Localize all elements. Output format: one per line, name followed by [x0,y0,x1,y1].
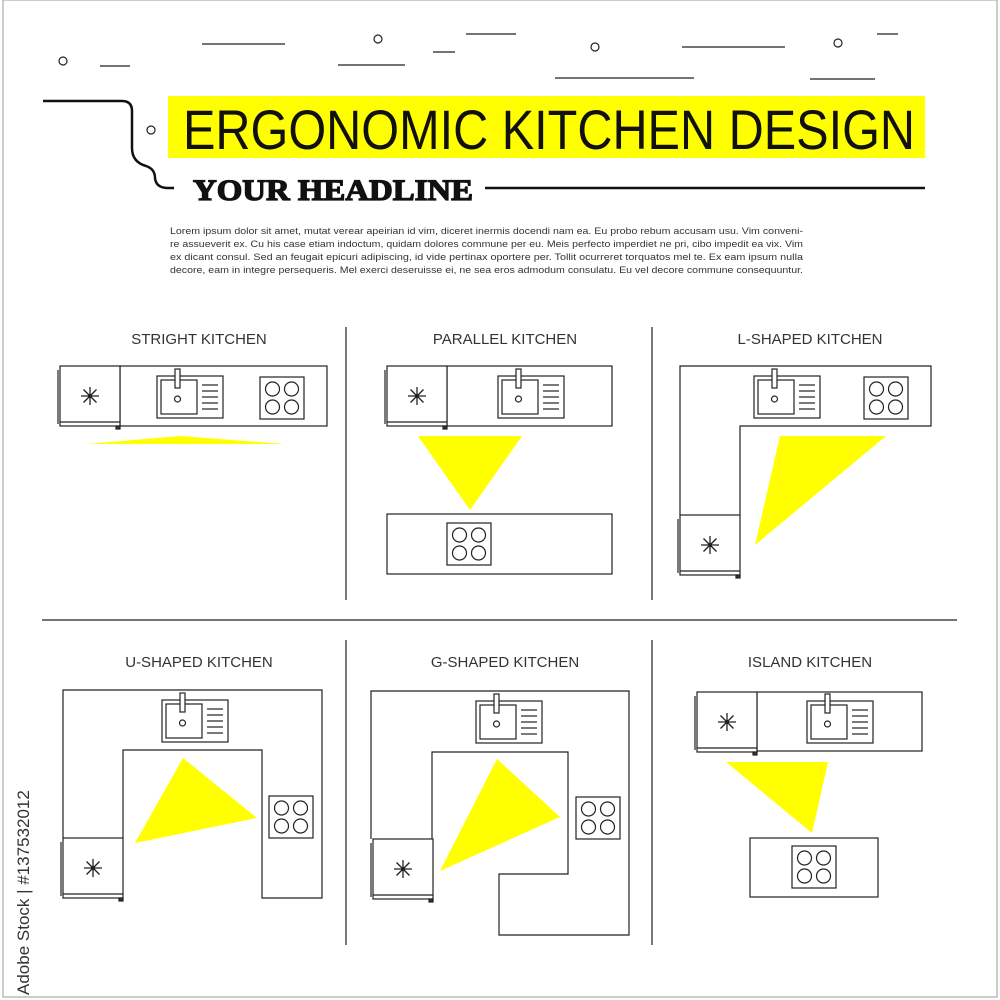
panel: straight kitchen: STRIGHT KITCHEN [131,331,267,348]
intro paragraph: re assueverit ex. Cu his case etiam indoctum, quidam dolores commune per eu. Meis perfecto imperdiet ne pri, cibo impedit ea vix. Vim [170,239,803,250]
panel: L-shaped kitchen [678,331,931,578]
panel: parallel kitchen: PARALLEL KITCHEN [433,331,577,348]
intro paragraph: ex dicant consul. Sed an feugait epicuri adipiscing, id vide pertinax oportere per. Tollit ocurreret torquatos mel te. Ex eam ipsum nulla [170,252,804,263]
panel: island kitchen [695,654,922,897]
panel: L-shaped kitchen: L-SHAPED KITCHEN [737,331,883,348]
decorative connector line [43,101,174,188]
panel: G-shaped kitchen [371,654,629,935]
intro paragraph [170,226,804,276]
subtitle: your headline: YOUR HEADLINE [193,174,473,207]
panel: straight kitchen [58,331,327,444]
panel: U-shaped kitchen [61,654,322,901]
panel: U-shaped kitchen: U-SHAPED KITCHEN [125,654,273,671]
panel: parallel kitchen [385,331,612,574]
intro paragraph: Lorem ipsum dolor sit amet, mutat verear apeirian id vim, diceret inermis docendi nam ea. Eu probo rebum accusam usu. Vim conveni- [170,226,803,237]
watermark credit: Adobe Stock | #137532012 [14,790,33,995]
panel: G-shaped kitchen: G-SHAPED KITCHEN [431,654,579,671]
intro paragraph: decore, eam in integre persequeris. Mel exerci deseruisse ei, ne sea eros admodum consulatu. Eu vel decore commune consequuntur. [170,265,803,276]
panel: island kitchen: ISLAND KITCHEN [748,654,872,671]
